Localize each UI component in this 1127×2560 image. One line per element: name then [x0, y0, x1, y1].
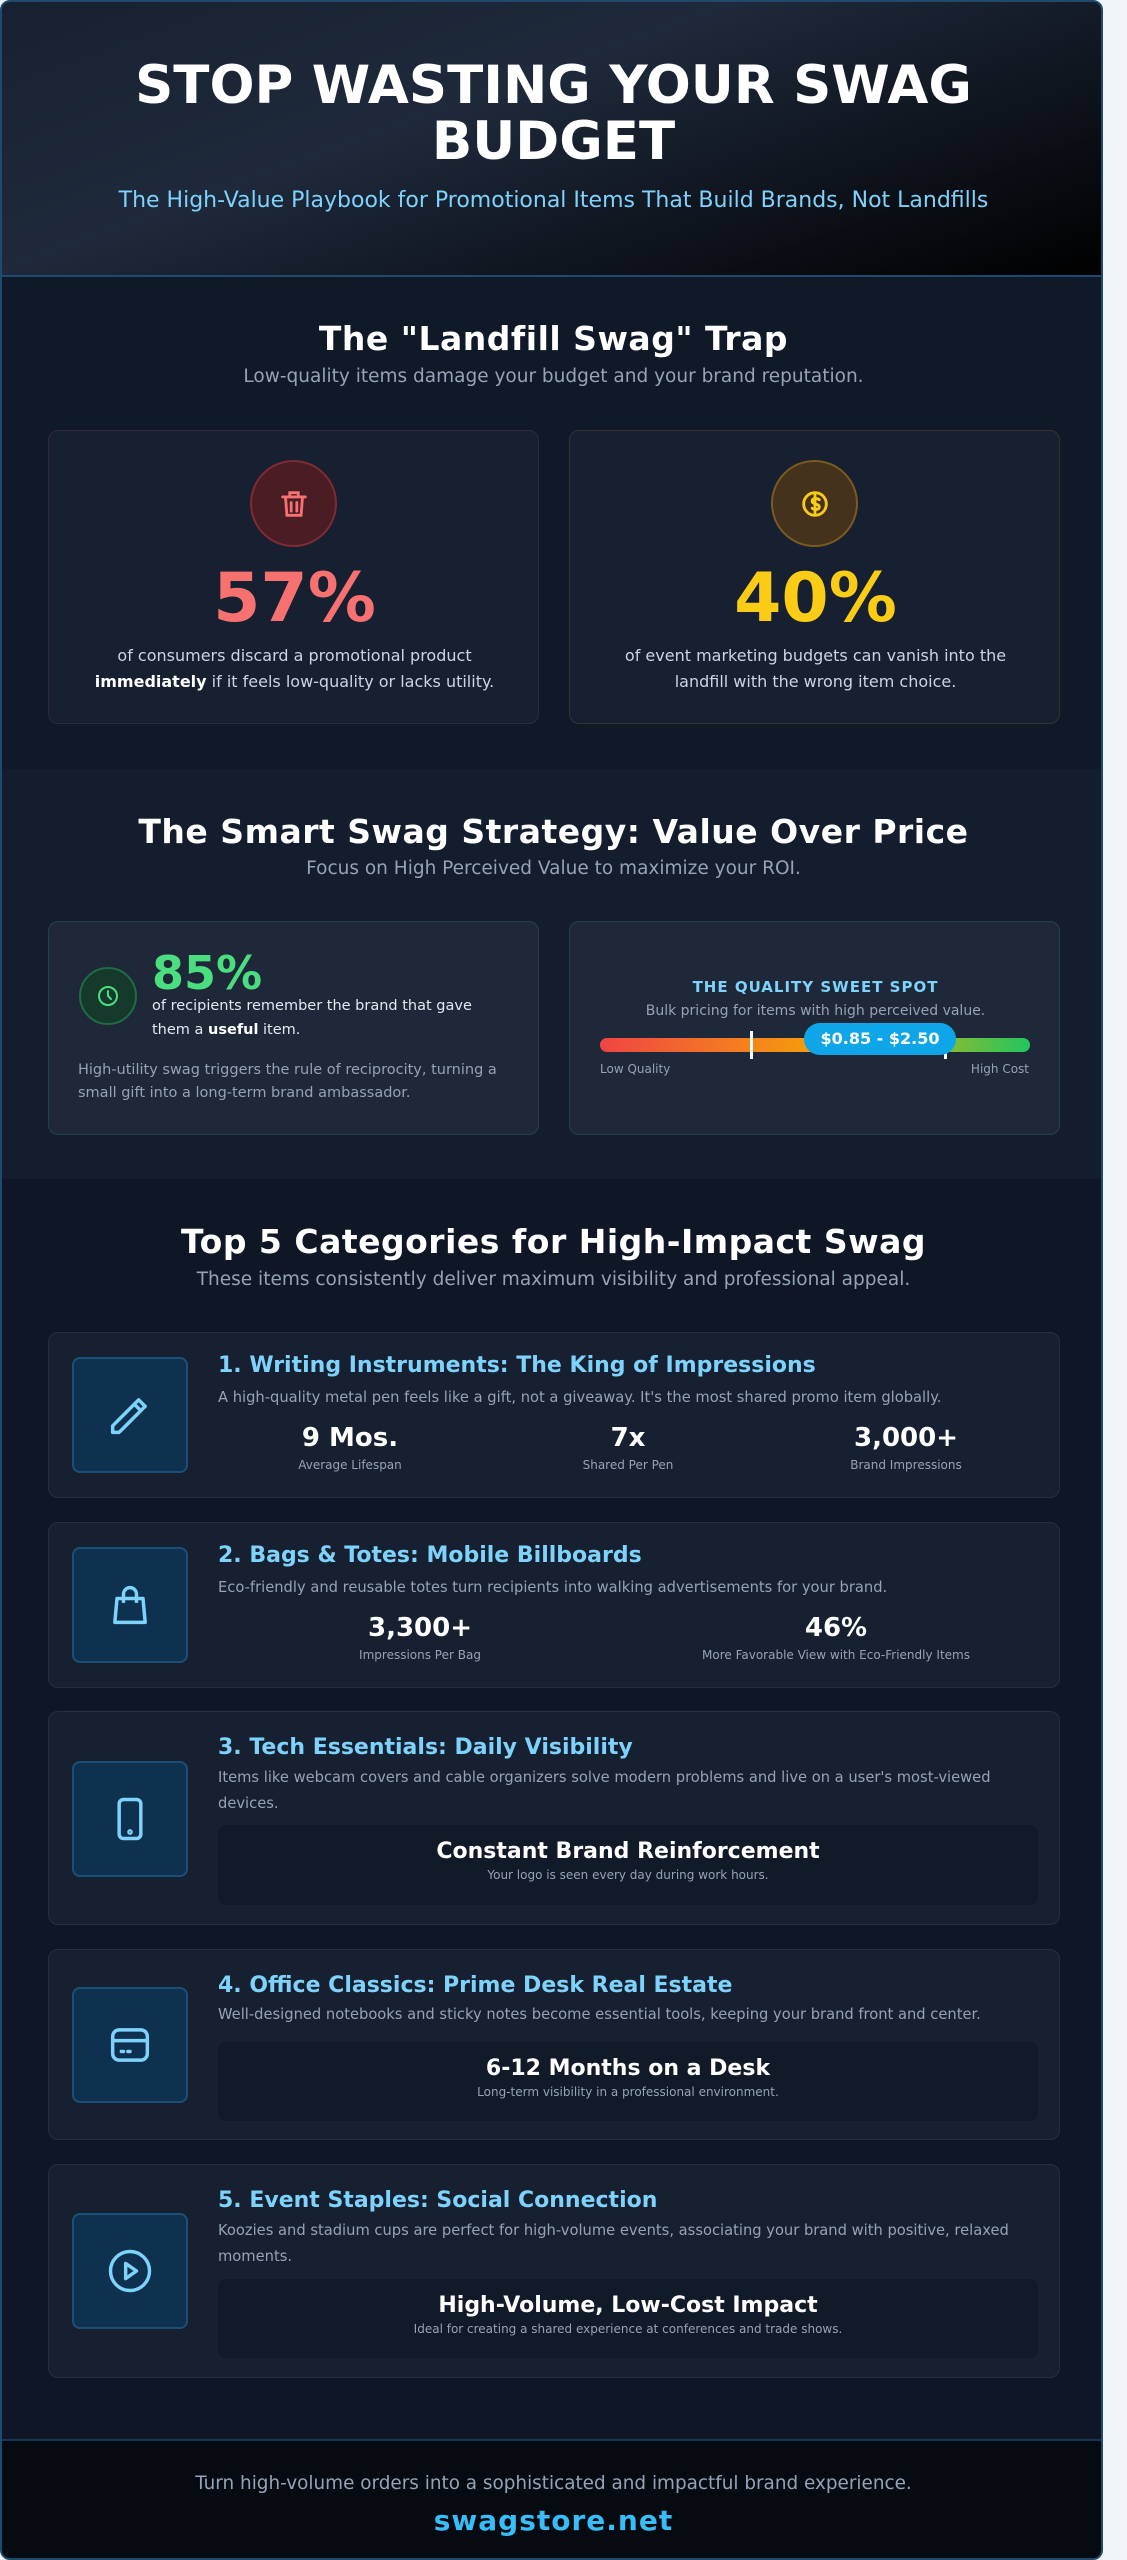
category 4: [48, 1949, 1060, 2140]
stat description: of recipients remember the brand that gave them a useful item.: [152, 998, 472, 1038]
description: Well-designed notebooks and sticky notes become essential tools, keeping your brand front and center.: [218, 2006, 981, 2023]
icon: phone: [72, 1761, 188, 1877]
stats: More Favorable View with Eco-Friendly Items: [702, 1648, 970, 1662]
highlight box: [218, 2042, 1038, 2121]
footer text: Turn high-volume orders into a sophisticated and impactful brand experience.: [195, 2473, 912, 2494]
card: 40%: [569, 430, 1060, 724]
category 2: [48, 1522, 1060, 1688]
highlight box: Ideal for creating a shared experience at conferences and trade shows.: [414, 2322, 842, 2336]
stat 40%: 40%: [734, 559, 897, 638]
highlight box: [218, 1825, 1038, 1905]
stats: 9 Mos.: [302, 1423, 398, 1453]
sweet spot title: THE QUALITY SWEET SPOT: [693, 978, 938, 996]
paragraph: High-utility swag triggers the rule of reciprocity, turning a small gift into a long-term brand ambassador.: [78, 1062, 497, 1101]
header: [2, 2, 1105, 277]
subheading: These items consistently deliver maximum visibility and professional appeal.: [197, 1269, 910, 1290]
stats: [359, 1613, 970, 1662]
category 3: [48, 1711, 1060, 1925]
category 5: [48, 2164, 1060, 2378]
icon: clock: [79, 967, 137, 1025]
description: landfill with the wrong item choice.: [675, 672, 956, 691]
icon: play: [72, 2213, 188, 2329]
card: 85%: [48, 921, 539, 1135]
card: quality sweet spot: [569, 921, 1060, 1135]
price pill: $0.85 - $2.50: [820, 1029, 940, 1048]
description: A high-quality metal pen feels like a gift, not a giveaway. It's the most shared promo item globally.: [218, 1389, 941, 1406]
description: of event marketing budgets can vanish into the: [625, 646, 1006, 665]
highlight box: Long-term visibility in a professional environment.: [477, 2085, 779, 2099]
subtitle: The High-Value Playbook for Promotional Items That Build Brands, Not Landfills: [119, 188, 988, 213]
stats: Average Lifespan: [298, 1458, 402, 1472]
title: BUDGET: [432, 111, 675, 172]
highlight box: Constant Brand Reinforcement: [436, 1839, 820, 1864]
stats: Shared Per Pen: [583, 1458, 673, 1472]
title: 5. Event Staples: Social Connection: [218, 2188, 657, 2213]
subheading: Low-quality items damage your budget and your brand reputation.: [243, 366, 864, 387]
title: 3. Tech Essentials: Daily Visibility: [218, 1735, 633, 1760]
title: [135, 55, 972, 172]
stat 85%: 85%: [152, 946, 262, 1000]
footer: [2, 2439, 1105, 2560]
stats: 3,300+: [368, 1613, 472, 1643]
description: [625, 646, 1006, 691]
description: Eco-friendly and reusable totes turn recipients into walking advertisements for your brand.: [218, 1579, 887, 1596]
sweet spot subtitle: Bulk pricing for items with high perceived value.: [646, 1003, 985, 1019]
description: Koozies and stadium cups are perfect for high-volume events, associating your brand with positive, relaxed moments.: [218, 2222, 1009, 2265]
title: 1. Writing Instruments: The King of Impressions: [218, 1353, 816, 1378]
title: STOP WASTING YOUR SWAG: [135, 55, 972, 116]
label high cost: High Cost: [971, 1062, 1029, 1076]
footer url: swagstore.net: [434, 2504, 673, 2537]
section: smart swag strategy: [2, 769, 1105, 1179]
price pill: [804, 1023, 956, 1055]
heading: The Smart Swag Strategy: Value Over Price: [138, 812, 969, 851]
icon: bag: [72, 1547, 188, 1663]
subheading: Focus on High Perceived Value to maximize your ROI.: [306, 858, 801, 879]
label low quality: Low Quality: [600, 1062, 670, 1076]
highlight box: Your logo is seen every day during work hours.: [487, 1868, 769, 1882]
description: of consumers discard a promotional product: [117, 646, 472, 665]
title: 4. Office Classics: Prime Desk Real Estate: [218, 1973, 732, 1998]
icon: trash: [250, 460, 337, 547]
highlight box: [218, 2279, 1038, 2358]
icon: notebook: [72, 1987, 188, 2103]
stats: Brand Impressions: [850, 1458, 962, 1472]
description: immediately if it feels low-quality or lacks utility.: [95, 672, 494, 691]
icon: pen: [72, 1357, 188, 1473]
stats: [298, 1423, 962, 1472]
stat 57%: 57%: [213, 559, 376, 638]
stats: Impressions Per Bag: [359, 1648, 481, 1662]
heading: The "Landfill Swag" Trap: [319, 319, 788, 358]
description: [95, 646, 494, 691]
stats: 7x: [611, 1423, 645, 1453]
highlight box: High-Volume, Low-Cost Impact: [438, 2293, 818, 2318]
description: Items like webcam covers and cable organizers solve modern problems and live on a user's most-viewed devices.: [218, 1769, 991, 1812]
section: top 5 categories: [2, 1179, 1105, 2439]
card: 57%: [48, 430, 539, 724]
gradient bar: [600, 1038, 1030, 1052]
section: landfill swag trap: [2, 277, 1105, 769]
stats: 3,000+: [854, 1423, 958, 1453]
highlight box: 6-12 Months on a Desk: [486, 2056, 770, 2081]
icon: dollar: [771, 460, 858, 547]
heading: Top 5 Categories for High-Impact Swag: [181, 1222, 926, 1261]
stats: 46%: [805, 1613, 867, 1643]
category 1: [48, 1332, 1060, 1498]
title: 2. Bags & Totes: Mobile Billboards: [218, 1543, 642, 1568]
